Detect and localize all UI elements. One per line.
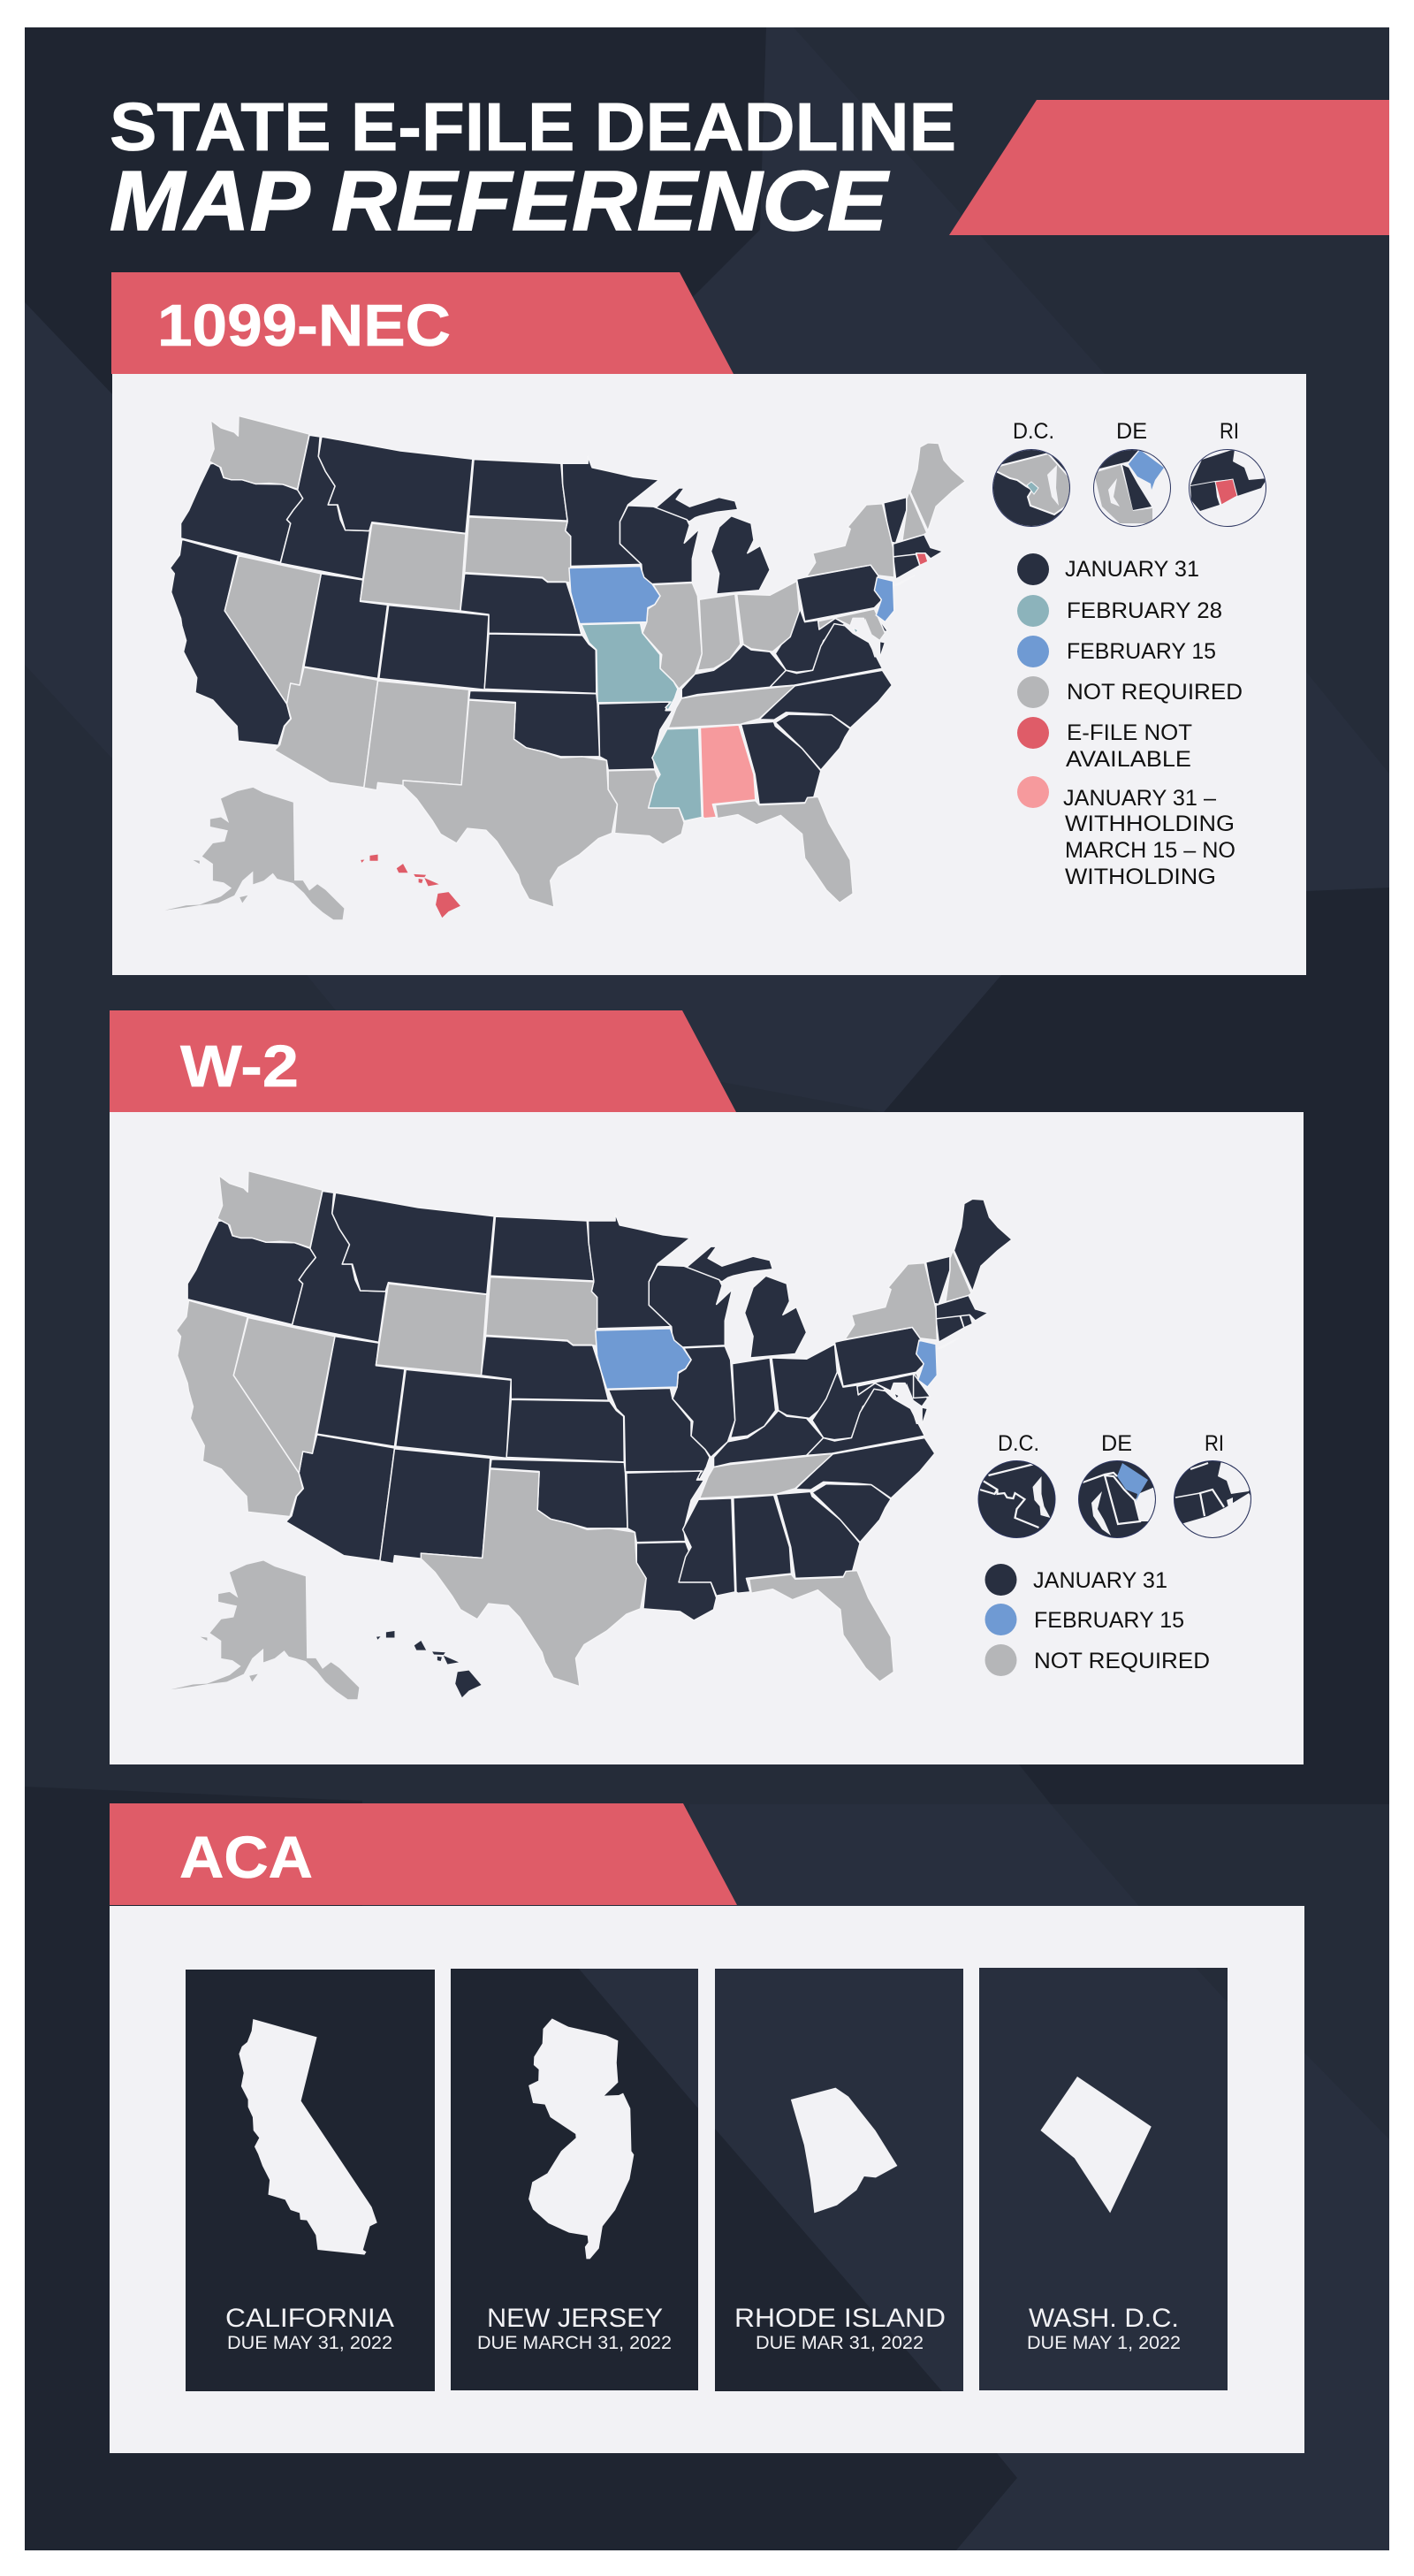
icon: Rhode Island outline [791, 2088, 897, 2213]
legend: W-2: FEBRUARY 15 [1034, 1608, 1184, 1633]
heading: 1099-NEC [111, 272, 734, 374]
heading: W-2 [110, 1010, 736, 1112]
card: Washington D.C.: WASH. D.C. [1029, 2304, 1179, 2333]
legend: 1099-NEC: FEBRUARY 28 [1067, 598, 1222, 623]
panel background [112, 374, 1306, 975]
card: Rhode Island: DUE MAR 31, 2022 [756, 2332, 924, 2353]
panel: W-2 [110, 1010, 1304, 1764]
legend: 1099-NEC: WITHHOLDING [1065, 812, 1235, 836]
heading: 1099-NEC: 1099-NEC [157, 293, 451, 359]
card: New Jersey: NEW JERSEY [487, 2304, 663, 2333]
icon: D.C. outline [1040, 2077, 1152, 2213]
legend: W-2 [984, 1564, 1210, 1676]
title banner accent [949, 100, 1389, 235]
legend: 1099-NEC: FEBRUARY 15 [1067, 639, 1216, 664]
card: California: DUE MAY 31, 2022 [227, 2332, 392, 2353]
card: Rhode Island [715, 1969, 963, 2391]
inset: RI [1190, 419, 1267, 527]
inset: DE: DE [1101, 1431, 1132, 1456]
card: California [186, 1970, 435, 2391]
map: W-2 deadlines by state [171, 1170, 1012, 1699]
title [110, 89, 956, 248]
legend: W-2: NOT REQUIRED [1034, 1649, 1210, 1673]
heading: W-2: W-2 [180, 1033, 299, 1100]
inset: D.C.: D.C. [1013, 419, 1054, 444]
legend: 1099-NEC: AVAILABLE [1066, 747, 1191, 772]
legend: 1099-NEC: E-FILE NOT [1067, 720, 1192, 745]
states: February 28 [582, 623, 858, 821]
inset: RI: RI [1205, 1431, 1224, 1456]
card: Washington D.C. [979, 1968, 1228, 2390]
inset: DE: DE [1116, 419, 1147, 444]
states: February 15 [569, 566, 894, 624]
icon: New Jersey outline [528, 2018, 634, 2259]
inset: RI [1174, 1431, 1253, 1540]
card: New Jersey: DUE MARCH 31, 2022 [477, 2332, 672, 2353]
heading: ACA [110, 1803, 737, 1905]
inset: DE [1078, 1431, 1157, 1538]
title: MAP REFERENCE [110, 154, 890, 248]
card: California: CALIFORNIA [225, 2304, 394, 2333]
states: not required [164, 415, 965, 919]
states: January 31 [187, 1191, 1012, 1697]
legend: 1099-NEC: WITHOLDING [1065, 865, 1216, 889]
card: Rhode Island: RHODE ISLAND [734, 2304, 946, 2333]
title: STATE E-FILE DEADLINE [110, 89, 956, 165]
states: February 15 [596, 1329, 937, 1389]
panel background [110, 1112, 1304, 1764]
panel: 1099-NEC [111, 272, 1306, 975]
card: Washington D.C.: DUE MAY 1, 2022 [1027, 2332, 1181, 2353]
legend: 1099-NEC: NOT REQUIRED [1067, 680, 1243, 705]
legend: 1099-NEC [1017, 553, 1243, 889]
legend: 1099-NEC: MARCH 15 – NO [1065, 838, 1235, 863]
inset: D.C. [978, 1431, 1055, 1538]
heading: ACA: ACA [179, 1825, 313, 1891]
legend: 1099-NEC: JANUARY 31 [1065, 557, 1199, 582]
panel background [110, 1906, 1304, 2453]
card: New Jersey [451, 1969, 698, 2390]
panel: ACA [110, 1803, 1304, 2453]
inset: RI: RI [1220, 419, 1239, 444]
legend: W-2: JANUARY 31 [1033, 1568, 1167, 1593]
states: not required [171, 1170, 971, 1699]
legend: 1099-NEC: JANUARY 31 – [1063, 786, 1216, 811]
map: 1099-NEC deadlines by state [164, 415, 965, 919]
icon: California outline [239, 2019, 377, 2255]
inset: DE [1092, 419, 1170, 527]
states: e-file not available [361, 553, 928, 918]
states: January 31 [170, 435, 943, 804]
inset: D.C. [992, 419, 1071, 527]
inset: D.C.: D.C. [998, 1431, 1039, 1456]
state: Alabama withholding [700, 725, 756, 819]
